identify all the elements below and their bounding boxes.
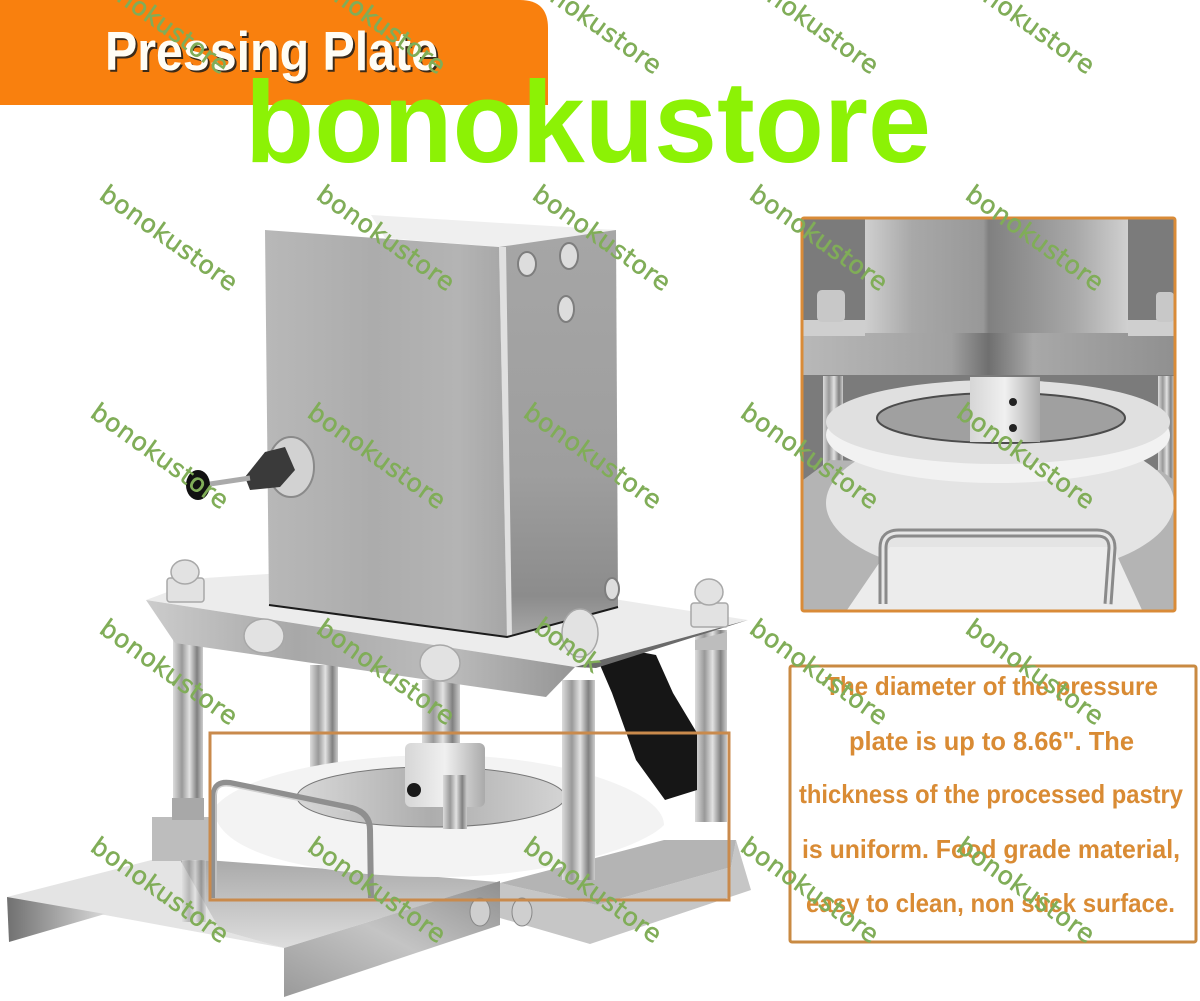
description text: The diameter of the pressure — [825, 671, 1158, 701]
repeated diagonal watermarks: bonokustore — [961, 179, 1109, 297]
description text: plate is up to 8.66". The — [849, 726, 1134, 756]
repeated diagonal watermarks: bonokustore — [519, 397, 667, 515]
repeated diagonal watermarks: bonokustore — [745, 613, 893, 731]
description text: easy to clean, non stick surface. — [806, 888, 1175, 918]
title shadow and text: Pressing Plate — [107, 22, 440, 84]
stainless housing box — [265, 215, 618, 637]
bolts on housing — [518, 243, 619, 600]
repeated diagonal watermarks: bonokustore — [528, 179, 676, 297]
power cable bundle — [600, 650, 697, 800]
repeated diagonal watermarks: bonok — [529, 612, 607, 679]
repeated diagonal watermarks: bonokustore — [736, 831, 884, 949]
text box frame — [790, 666, 1196, 942]
white pressing disc — [214, 755, 664, 877]
front support leg — [562, 680, 595, 880]
repeated diagonal watermarks: bonokustore — [952, 397, 1100, 515]
repeated diagonal watermarks: bonokustore — [86, 397, 234, 515]
description text: is uniform. Food grade material, — [802, 834, 1180, 864]
repeated diagonal watermarks: bonokustore — [952, 831, 1100, 949]
repeated diagonal watermarks: bonokustore — [961, 613, 1109, 731]
description text box — [790, 666, 1196, 942]
title shadow and text: Pressing Plate — [105, 20, 438, 82]
repeated diagonal watermarks: bonokustore — [736, 397, 884, 515]
detail inset photo — [802, 218, 1175, 611]
title banner — [0, 0, 548, 105]
large lime brand watermark: bonokustore — [245, 57, 931, 187]
acorn nuts on plate — [167, 560, 728, 681]
inset frame — [802, 218, 1175, 611]
top mounting plate — [146, 570, 748, 697]
rear and front support legs — [172, 630, 727, 822]
centre press shaft and collar — [405, 680, 485, 829]
repeated diagonal watermarks: bonokustore — [95, 179, 243, 297]
repeated diagonal watermarks: bonokustore — [303, 397, 451, 515]
repeated diagonal watermarks: bonokustore — [519, 831, 667, 949]
product photo: pressing machine — [7, 215, 751, 997]
joystick control lever — [186, 437, 314, 500]
repeated diagonal watermarks: bonokustore — [312, 613, 460, 731]
handle bar — [214, 783, 371, 898]
repeated diagonal watermarks: bonokustore — [745, 179, 893, 297]
repeated diagonal watermarks: bonokustore — [303, 831, 451, 949]
repeated diagonal watermarks: bonokustore — [95, 613, 243, 731]
repeated diagonal watermarks: bonokustore — [312, 179, 460, 297]
highlight frame on pressing plate — [210, 733, 729, 900]
repeated diagonal watermarks: bonokustore — [86, 831, 234, 949]
machine base tray — [7, 817, 751, 997]
